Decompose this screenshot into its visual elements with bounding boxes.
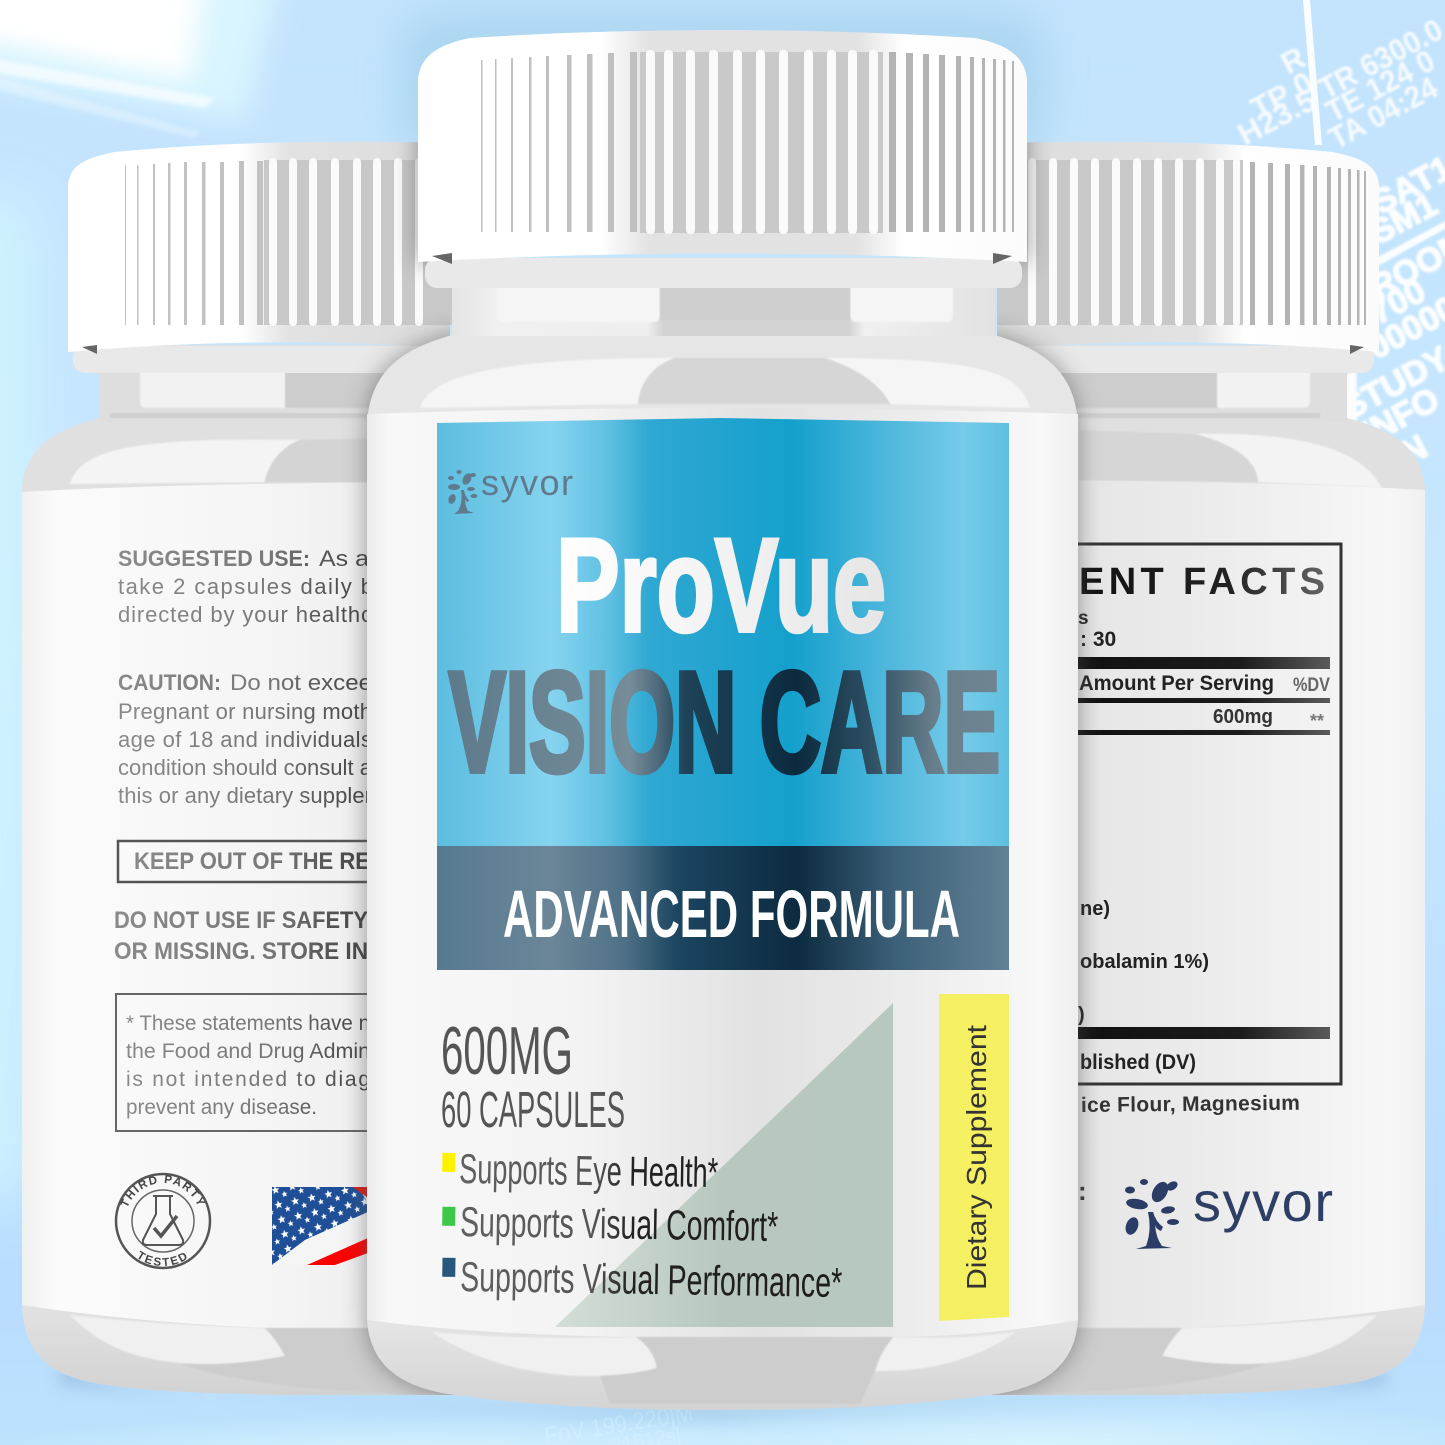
- left label: FDA disclaimer box: prevent any disease.: [126, 1096, 317, 1119]
- label: dark band with advanced formula: [437, 846, 1009, 970]
- right bottle cap: [997, 142, 1379, 354]
- right bottle neck ring: [997, 346, 1374, 373]
- left label: suggested use: directed by your healthc: [118, 602, 372, 627]
- label: green triangle: [555, 1003, 893, 1327]
- benefit: visual performance: [442, 1253, 843, 1306]
- left bottle cap: [68, 142, 454, 354]
- label: benefit list: [442, 1145, 843, 1306]
- right bottle silhouette: [947, 345, 1425, 1395]
- logo: syvor, front label: [447, 462, 573, 514]
- centre bottle base shadow: [600, 1337, 893, 1404]
- logo: syvor, right bottle: syvor: [1193, 1170, 1333, 1233]
- left label: FDA disclaimer box: * These statements have n: [126, 1012, 370, 1035]
- left label: FDA disclaimer box: [116, 994, 378, 1131]
- logo: syvor, right bottle: [1123, 1170, 1333, 1249]
- centre bottle label area: [367, 408, 1078, 1337]
- title: ProVue: ProVue: [556, 512, 886, 660]
- logo: syvor, front label: syvor: [481, 462, 573, 503]
- dose row: **: [1310, 711, 1324, 731]
- other ingredients line: ice Flour, Magnesium: [1081, 1092, 1300, 1117]
- background HUD data text, right: SM1: [1364, 186, 1443, 252]
- left label: keep out of reach box: [118, 841, 378, 882]
- label: dosage: 600MG: [441, 1013, 573, 1089]
- background HUD data text, right: TP 0: [1245, 65, 1319, 126]
- distributed by colon: :: [1078, 1176, 1087, 1206]
- centre bottle: main product: [367, 30, 1078, 1410]
- background HUD data text, right: TE 124 0: [1320, 43, 1440, 129]
- benefit: visual performance: Supports Visual Performance*: [460, 1253, 843, 1306]
- amount per serving row: %DV: [1293, 675, 1330, 696]
- title: VISION CARE: VISION CARE: [449, 643, 1000, 802]
- left label: caution: condition should consult a: [118, 755, 373, 780]
- left label: caution: age of 18 and individuals: [118, 727, 372, 752]
- icon: third party tested badge: TESTED: [138, 1250, 186, 1266]
- left label: safety warning: [114, 907, 368, 965]
- left bottle: back label: [22, 142, 454, 1395]
- left label: caution: Do not excee: [230, 670, 372, 695]
- icon: USA flag: [272, 1187, 368, 1265]
- label: dark band with advanced formula: ADVANCED FORMULA: [503, 877, 960, 952]
- left label: caution: CAUTION:: [118, 670, 221, 695]
- left label: safety warning: DO NOT USE IF SAFETY: [114, 907, 368, 934]
- right bottle shoulder highlights: [1195, 434, 1382, 488]
- left bottle silhouette: [22, 345, 500, 1395]
- icon: third party tested badge: THIRD PARTY: [120, 1175, 205, 1206]
- label: dosage: [441, 1013, 625, 1138]
- daily value note: blished (DV): [1080, 1051, 1196, 1074]
- left label: caution: this or any dietary suppler: [118, 783, 372, 808]
- serving info: [1078, 608, 1116, 651]
- benefit: eye health: Supports Eye Health*: [459, 1145, 719, 1196]
- background: lighter left edge: [0, 200, 30, 1200]
- background HUD data text, right: IN: [1386, 428, 1434, 477]
- background HUD data text, right: 700: [1364, 272, 1432, 332]
- left label: safety warning: OR MISSING. STORE IN: [114, 938, 368, 965]
- label: yellow dietary supplement strip: Dietary Supplement: [961, 1025, 992, 1290]
- left label: caution: Pregnant or nursing moth: [118, 699, 372, 724]
- left label: suggested use: SUGGESTED USE:: [118, 546, 310, 571]
- background HUD data text, right: R: [1275, 40, 1311, 81]
- left bottle label area: [22, 482, 500, 1328]
- background shadow behind centre cap: [400, 12, 1045, 162]
- centre bottle silhouette: [367, 335, 1078, 1410]
- ingredient fragments: ne): [1080, 898, 1110, 920]
- left label: caution: [118, 670, 373, 808]
- serving info: : 30: [1080, 628, 1116, 651]
- left label: FDA disclaimer box: is not intended to diag: [126, 1068, 370, 1091]
- left label: FDA disclaimer box: the Food and Drug Admin: [126, 1040, 370, 1063]
- amount per serving row: Amount Per Serving: [1079, 672, 1274, 695]
- right bottle: supplement facts: [947, 142, 1425, 1395]
- panel heading: ENT FACTS: [1079, 561, 1325, 603]
- dose row: 600mg: [1213, 706, 1273, 728]
- left label: suggested use: As a: [319, 546, 370, 571]
- centre bottle cap: [418, 30, 1027, 264]
- label: yellow dietary supplement strip: [939, 994, 1009, 1321]
- ingredient fragments: [1078, 898, 1209, 1026]
- right bottle label area: [947, 480, 1425, 1328]
- background HUD data text, right: [1232, 0, 1445, 477]
- icon: third party tested badge: [114, 1172, 212, 1270]
- centre bottle neck: [452, 270, 995, 336]
- left bottle neck ring: [73, 346, 450, 373]
- centre bottle neck ring: [425, 258, 1022, 288]
- left label: keep out of reach box: KEEP OUT OF THE RE: [134, 848, 370, 875]
- supplement facts panel: [1060, 544, 1341, 1084]
- benefit: visual comfort: Supports Visual Comfort*: [460, 1198, 779, 1250]
- left bottle base: [22, 1305, 500, 1395]
- shadow under bottles: [60, 1365, 1385, 1418]
- background HUD data text, right: INFO: [1356, 380, 1445, 452]
- background light flare, top left: [0, 0, 290, 138]
- left bottle neck: [100, 365, 450, 422]
- ingredient fragments: ): [1078, 1004, 1085, 1026]
- right bottle neck: [997, 365, 1347, 422]
- label: dosage: 60 CAPSULES: [441, 1081, 625, 1138]
- left bottle shoulder highlights: [70, 440, 300, 484]
- label: blue panel: [437, 418, 1009, 846]
- benefit: visual comfort: [442, 1198, 779, 1250]
- shadow cast by centre bottle on side bottles: [367, 80, 1078, 1410]
- background HUD data text, right: H23.5: [1232, 82, 1321, 152]
- centre bottle shoulder highlights: [420, 358, 675, 408]
- ingredient fragments: obalamin 1%): [1080, 951, 1209, 973]
- background bottom glow and faint data text: [0, 1397, 1445, 1445]
- right bottle base: [947, 1305, 1425, 1395]
- benefit: eye health: [442, 1145, 719, 1196]
- dose row: [1213, 706, 1324, 731]
- centre bottle base highlights: [432, 1332, 657, 1376]
- serving info: s: [1078, 608, 1089, 629]
- left label: suggested use: take 2 capsules daily b: [118, 574, 373, 599]
- left label: suggested use: [118, 546, 373, 627]
